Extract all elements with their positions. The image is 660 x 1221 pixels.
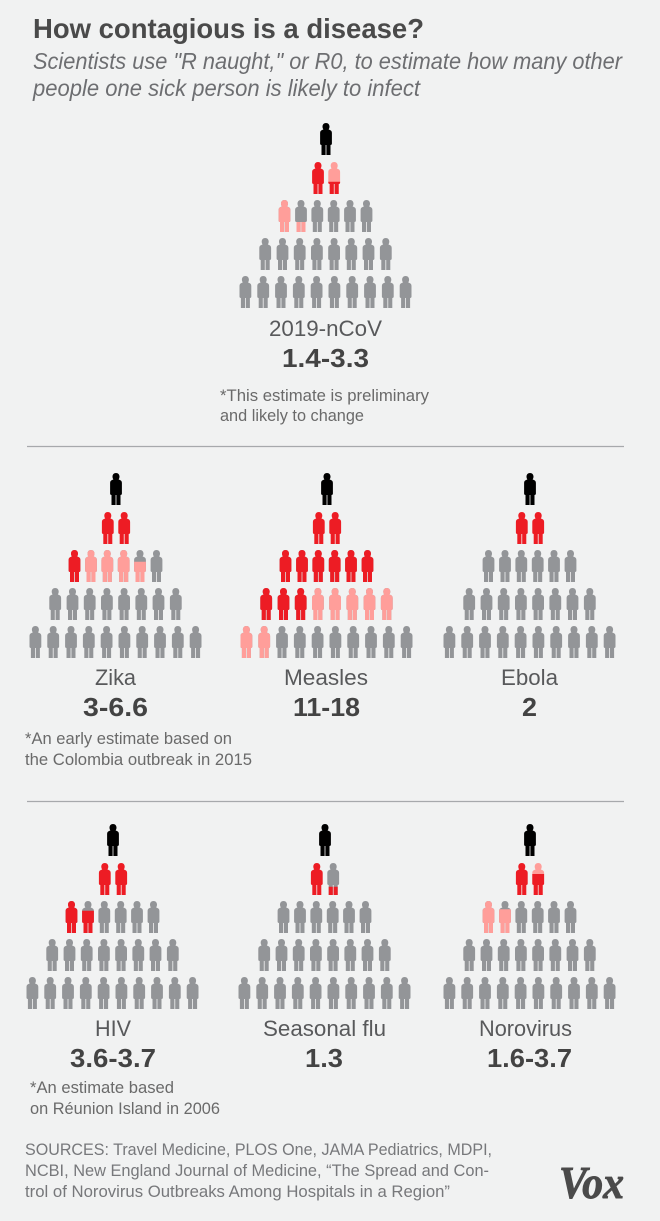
pictogram: Norovirus (444, 824, 616, 1009)
subtitle: Scientists use "R naught," or R0, to estimate how many other (33, 48, 623, 74)
sources: NCBI, New England Journal of Medicine, “The Spread and Con- (25, 1162, 489, 1180)
sources: SOURCES: Travel Medicine, PLOS One, JAMA Pediatrics, MDPI, (25, 1141, 492, 1159)
value: Seasonal flu: 1.3 (305, 1045, 343, 1073)
note: Zika: the Colombia outbreak in 2015 (25, 751, 252, 769)
sources (25, 1141, 492, 1201)
pictogram: Ebola (444, 473, 616, 658)
note: HIV (30, 1079, 220, 1118)
note: 2019-nCoV (220, 387, 430, 425)
label: Zika: Zika (95, 665, 137, 690)
value: Ebola: 2 (522, 694, 537, 722)
value: 2019-nCoV: 1.4-3.3 (282, 345, 369, 373)
pictogram: Zika (30, 473, 202, 658)
value: Measles: 11-18 (293, 694, 360, 722)
pictogram: 2019-nCoV (240, 123, 412, 308)
pictogram: Seasonal flu (238, 824, 410, 1009)
pictogram: Measles (240, 473, 412, 658)
label: Measles: Measles (284, 665, 368, 690)
note: 2019-nCoV: *This estimate is preliminary (220, 387, 430, 405)
label: HIV: HIV (95, 1016, 131, 1041)
title: How contagious is a disease? (33, 13, 424, 44)
label: Ebola: Ebola (501, 665, 559, 690)
label: Seasonal flu: Seasonal flu (263, 1016, 386, 1041)
sources: trol of Norovirus Outbreaks Among Hospitals in a Region” (25, 1183, 450, 1201)
label: Norovirus: Norovirus (479, 1016, 572, 1041)
note: HIV: on Réunion Island in 2006 (30, 1100, 220, 1118)
value: HIV: 3.6-3.7 (70, 1045, 156, 1073)
value: Zika: 3-6.6 (83, 694, 148, 722)
subtitle: people one sick person is likely to infect (32, 75, 422, 101)
note: HIV: *An estimate based (30, 1079, 174, 1097)
label: 2019-nCoV: 2019-nCoV (269, 316, 382, 341)
logo: Vox: Vox (559, 1158, 624, 1208)
subtitle (32, 48, 623, 101)
note: Zika (25, 730, 252, 769)
value: Norovirus: 1.6-3.7 (487, 1045, 572, 1073)
note: 2019-nCoV: and likely to change (220, 407, 364, 425)
note: Zika: *An early estimate based on (25, 730, 232, 748)
pictogram: HIV (26, 824, 198, 1009)
